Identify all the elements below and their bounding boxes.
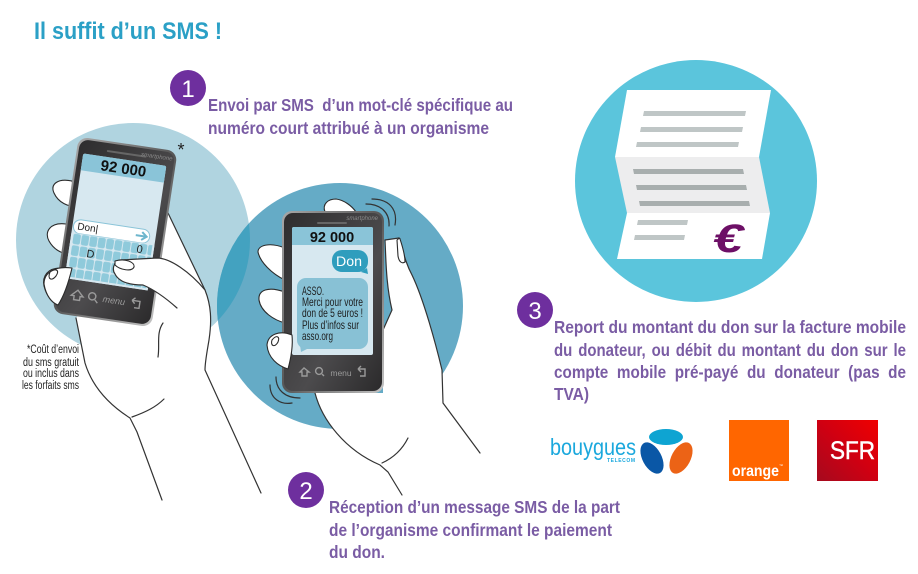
footnote: *Coût d’envoi	[27, 344, 79, 356]
document lines	[634, 111, 746, 240]
screen	[292, 227, 373, 355]
logo: Orange	[729, 420, 789, 481]
title: Il suffit d’un SMS !	[34, 18, 222, 45]
smartphone 2	[282, 211, 384, 393]
bubble: Don: Don	[336, 254, 362, 269]
folded document	[615, 90, 771, 157]
logo: Orange: orange	[732, 463, 779, 480]
step 2 badge	[288, 472, 324, 508]
euro sign: €	[713, 217, 745, 261]
hand body	[76, 213, 261, 500]
bubble: confirmation message: don de 5 euros !	[302, 306, 363, 320]
footnote: ou inclus dans	[23, 368, 79, 380]
keyboard	[65, 233, 155, 290]
smartphone 2: 92 000	[310, 230, 354, 246]
step 3 text: TVA)	[554, 384, 589, 404]
step 2 text: Réception d’un message SMS de la part	[329, 497, 620, 517]
footnote: du sms gratuit	[23, 357, 80, 369]
smartphone 1: Don|	[77, 221, 99, 235]
step 3 badge: 3	[528, 298, 542, 325]
footnote	[22, 344, 80, 392]
logo: Orange: ™	[779, 463, 783, 468]
icon: invoice in circle	[575, 60, 817, 302]
index finger edge and nail	[383, 240, 392, 330]
bubble: confirmation message: asso.org	[302, 329, 333, 343]
step 2 text: du don.	[329, 542, 385, 562]
asterisk: *	[177, 140, 185, 160]
bubble: confirmation message	[297, 278, 368, 352]
illustration: second hand holding phone	[258, 199, 480, 495]
step 1 badge	[170, 70, 206, 106]
screen	[65, 153, 166, 290]
logo: Bouygues Telecom: TELECOM	[607, 458, 635, 464]
logo: Bouygues Telecom	[550, 429, 697, 477]
step 2 text: de l’organisme confirmant le paiement	[329, 520, 612, 540]
smartphone 1: smartphone	[141, 152, 173, 163]
step 2 badge: 2	[299, 478, 313, 505]
phone buttons	[71, 288, 140, 309]
step 1 text: Envoi par SMS d’un mot-clé spécifique au	[208, 95, 513, 115]
bubble: confirmation message: Plus d’infos sur	[302, 318, 359, 332]
footnote: les forfaits sms	[22, 380, 79, 392]
phone buttons	[300, 366, 365, 376]
bubble: confirmation message: ASSO.	[302, 284, 324, 298]
logo: SFR	[817, 420, 878, 481]
step 3 text	[554, 317, 906, 404]
circle: left background	[16, 123, 250, 357]
finger tip on phone	[267, 333, 292, 369]
fingers	[258, 199, 356, 323]
smartphone 2: menu	[330, 368, 352, 378]
vibration arcs	[366, 199, 396, 226]
step 1 text	[208, 95, 513, 138]
hand body	[315, 238, 480, 495]
input field	[72, 219, 151, 244]
step 2 text	[329, 497, 620, 562]
illustration: first hand holding phone	[44, 137, 261, 500]
finger tip over phone	[44, 268, 72, 305]
fingers behind phone	[44, 180, 80, 305]
thumb	[113, 258, 205, 308]
logo: SFR: SFR	[830, 437, 875, 465]
step 1 text: numéro court attribué à un organisme	[208, 118, 489, 138]
smartphone 1: menu	[102, 294, 126, 307]
smartphone 2: smartphone	[346, 216, 379, 222]
bubble: Don	[332, 250, 368, 274]
smartphone 1: 0	[136, 243, 144, 256]
circle: right background	[217, 183, 463, 429]
step 3 badge	[517, 292, 553, 328]
smartphone 1: 92 000	[99, 157, 147, 181]
bubble: confirmation message: Merci pour votre	[302, 295, 363, 309]
smartphone 1: D	[86, 248, 95, 261]
step 1 badge: 1	[181, 76, 195, 103]
logo: Bouygues Telecom: bouygues	[550, 434, 636, 460]
smartphone 1	[52, 137, 178, 327]
